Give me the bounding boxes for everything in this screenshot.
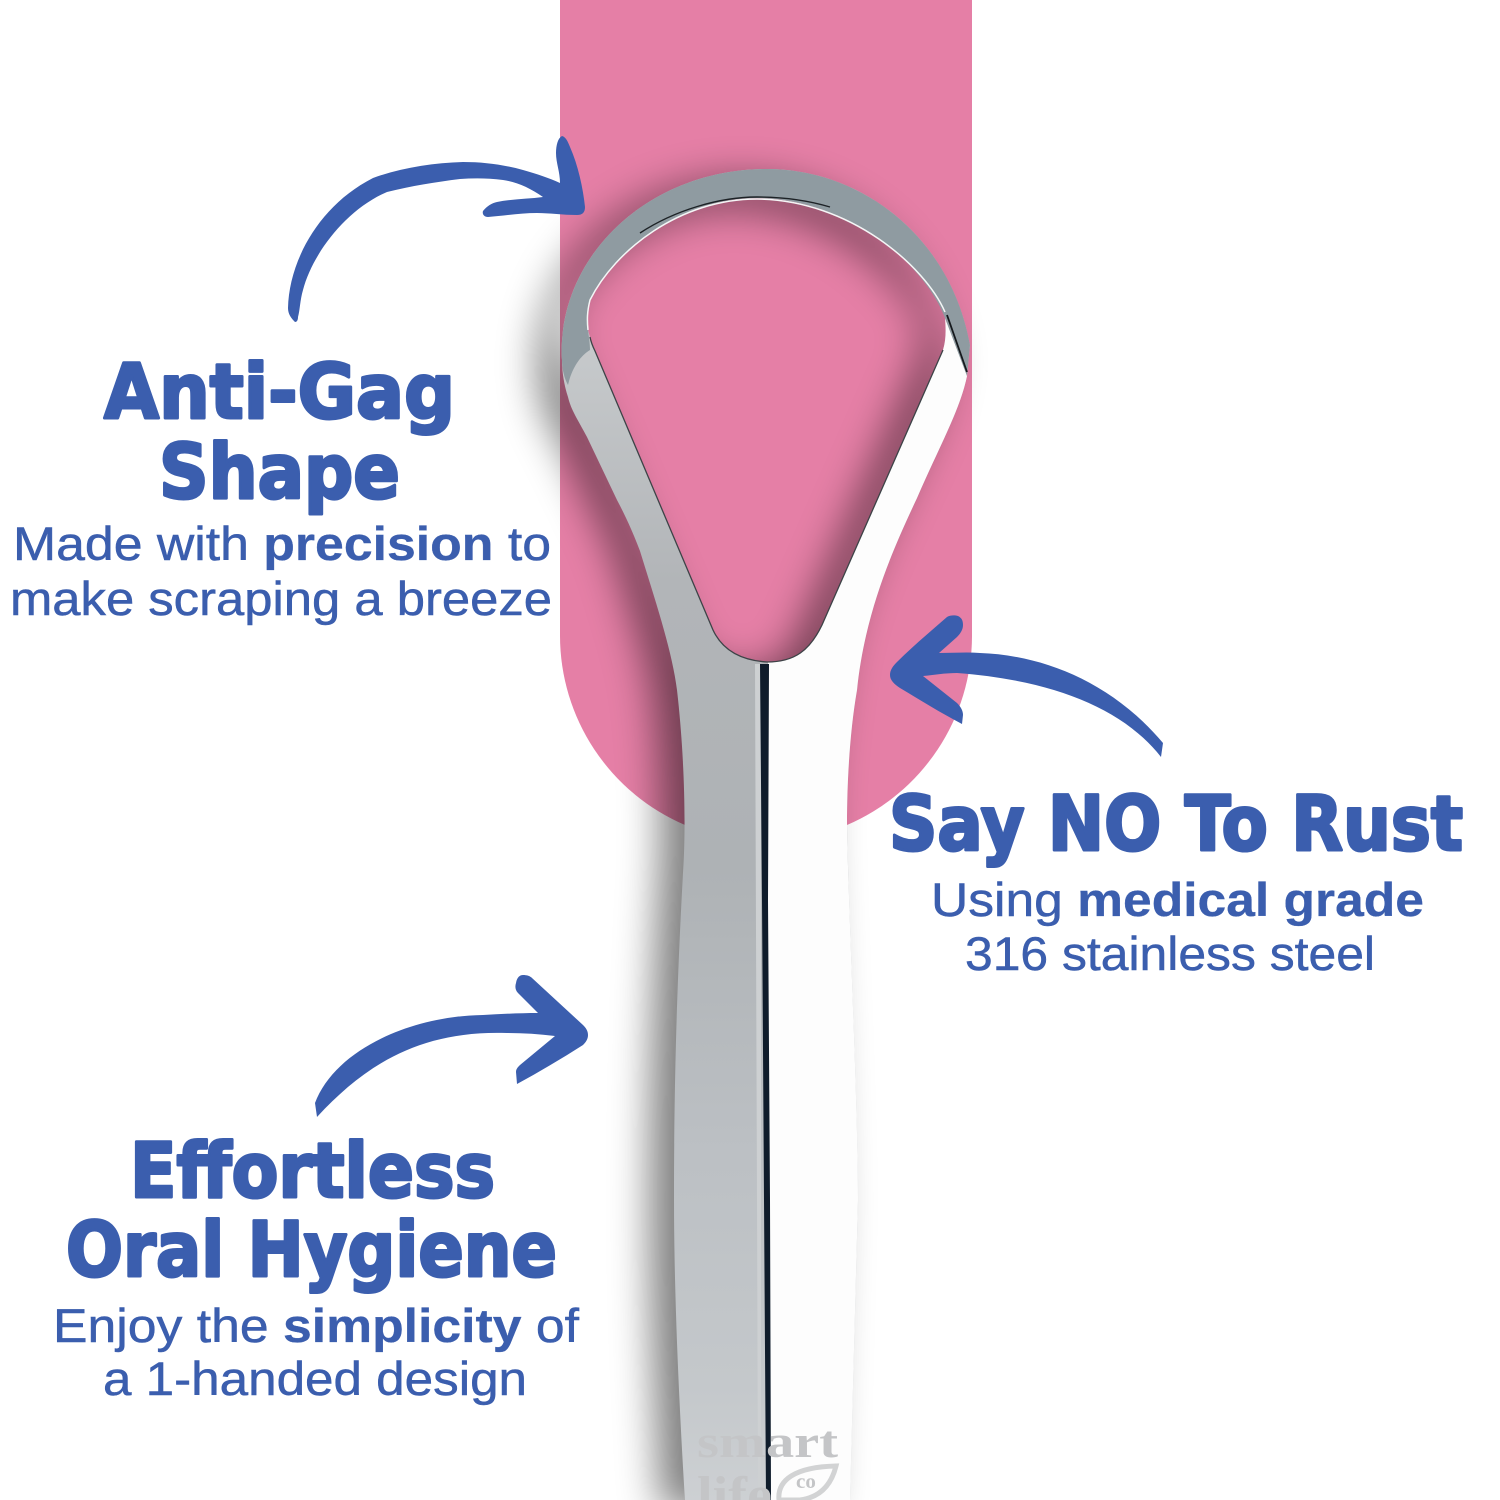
description: effortless: Enjoy the simplicity of (53, 1299, 580, 1352)
callout: say no to rust: 316 stainless steel (965, 927, 1375, 980)
tongue scraper product (562, 169, 970, 1500)
watermark logo: smart (697, 1416, 839, 1467)
callout: effortless oral hygiene: Oral Hygiene (66, 1205, 557, 1294)
description: anti-gag: Made with precision to (13, 517, 551, 570)
callout: anti-gag shape: Shape (159, 427, 400, 516)
callout: effortless oral hygiene: a 1-handed design (103, 1352, 527, 1405)
callout: anti-gag shape (10, 347, 552, 625)
description: no rust: Using medical grade (931, 873, 1424, 926)
watermark logo (697, 1416, 839, 1500)
panel: pink background (560, 0, 972, 825)
top band of the loop (562, 169, 970, 385)
rim highlights (587, 199, 945, 330)
arrow: anti-gag (288, 136, 585, 322)
centre groove (760, 664, 771, 1500)
centre groove light edge (755, 664, 761, 1500)
callout: say no to rust (889, 779, 1463, 980)
watermark logo: co (796, 1469, 816, 1493)
callout: effortless oral hygiene (53, 1126, 580, 1405)
heading: effortless: Effortless (130, 1126, 495, 1215)
heading: anti-gag shape: Anti-Gag (104, 347, 455, 436)
arrow: effortless (315, 975, 588, 1117)
arrow: no rust (890, 615, 1163, 757)
callout: anti-gag shape: make scraping a breeze (10, 572, 552, 625)
scraper silhouette with shadow (562, 169, 970, 1500)
right polished half (768, 318, 967, 1500)
